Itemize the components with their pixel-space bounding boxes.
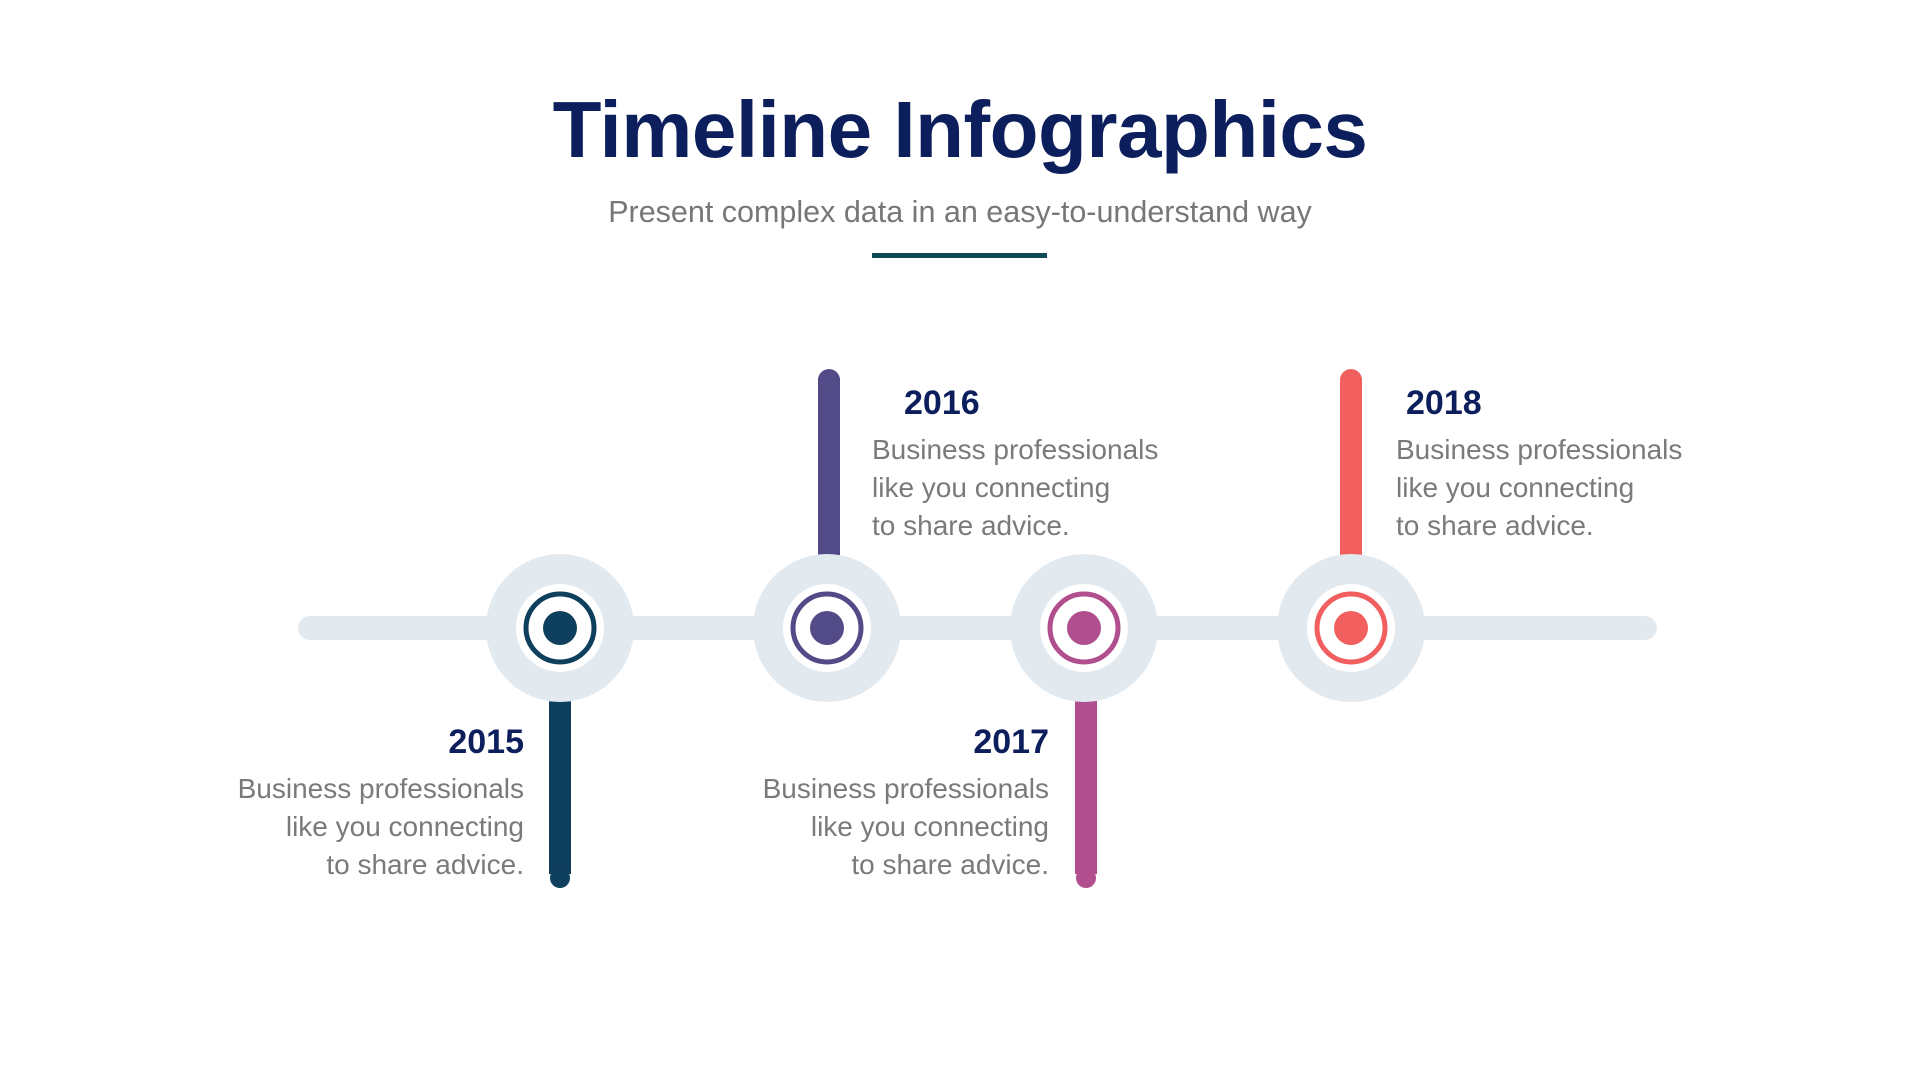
- label: 2017: like you connecting: [811, 811, 1049, 842]
- node: 2016: [753, 554, 901, 702]
- label: 2015: [238, 723, 524, 880]
- label: 2015: 2015: [448, 723, 524, 761]
- label: 2016: like you connecting: [872, 472, 1110, 503]
- bar: 2017: [1075, 696, 1097, 888]
- label: 2015: like you connecting: [286, 811, 524, 842]
- label: 2017: 2017: [973, 723, 1049, 761]
- label: 2017: Business professionals: [763, 773, 1049, 804]
- label: 2016: 2016: [904, 384, 980, 422]
- subtitle: Present complex data in an easy-to-understand way: [608, 195, 1312, 229]
- label: 2018: 2018: [1406, 384, 1482, 422]
- label: 2018: to share advice.: [1396, 510, 1594, 541]
- bar: 2016: [818, 369, 840, 558]
- label: 2016: Business professionals: [872, 434, 1158, 465]
- label: 2016: to share advice.: [872, 510, 1070, 541]
- label: 2015: Business professionals: [238, 773, 524, 804]
- node: 2017: [1010, 554, 1158, 702]
- label: 2016: [872, 384, 1158, 541]
- label: 2017: to share advice.: [851, 849, 1049, 880]
- node: 2018: [1277, 554, 1425, 702]
- title: Timeline Infographics: [553, 85, 1367, 174]
- node: 2015: [486, 554, 634, 702]
- bar: 2018: [1340, 369, 1362, 558]
- bar: 2015: [549, 696, 571, 888]
- label: 2015: to share advice.: [326, 849, 524, 880]
- underline: [872, 253, 1047, 258]
- label: 2018: like you connecting: [1396, 472, 1634, 503]
- label: 2018: [1396, 384, 1682, 541]
- label: 2018: Business professionals: [1396, 434, 1682, 465]
- label: 2017: [763, 723, 1049, 880]
